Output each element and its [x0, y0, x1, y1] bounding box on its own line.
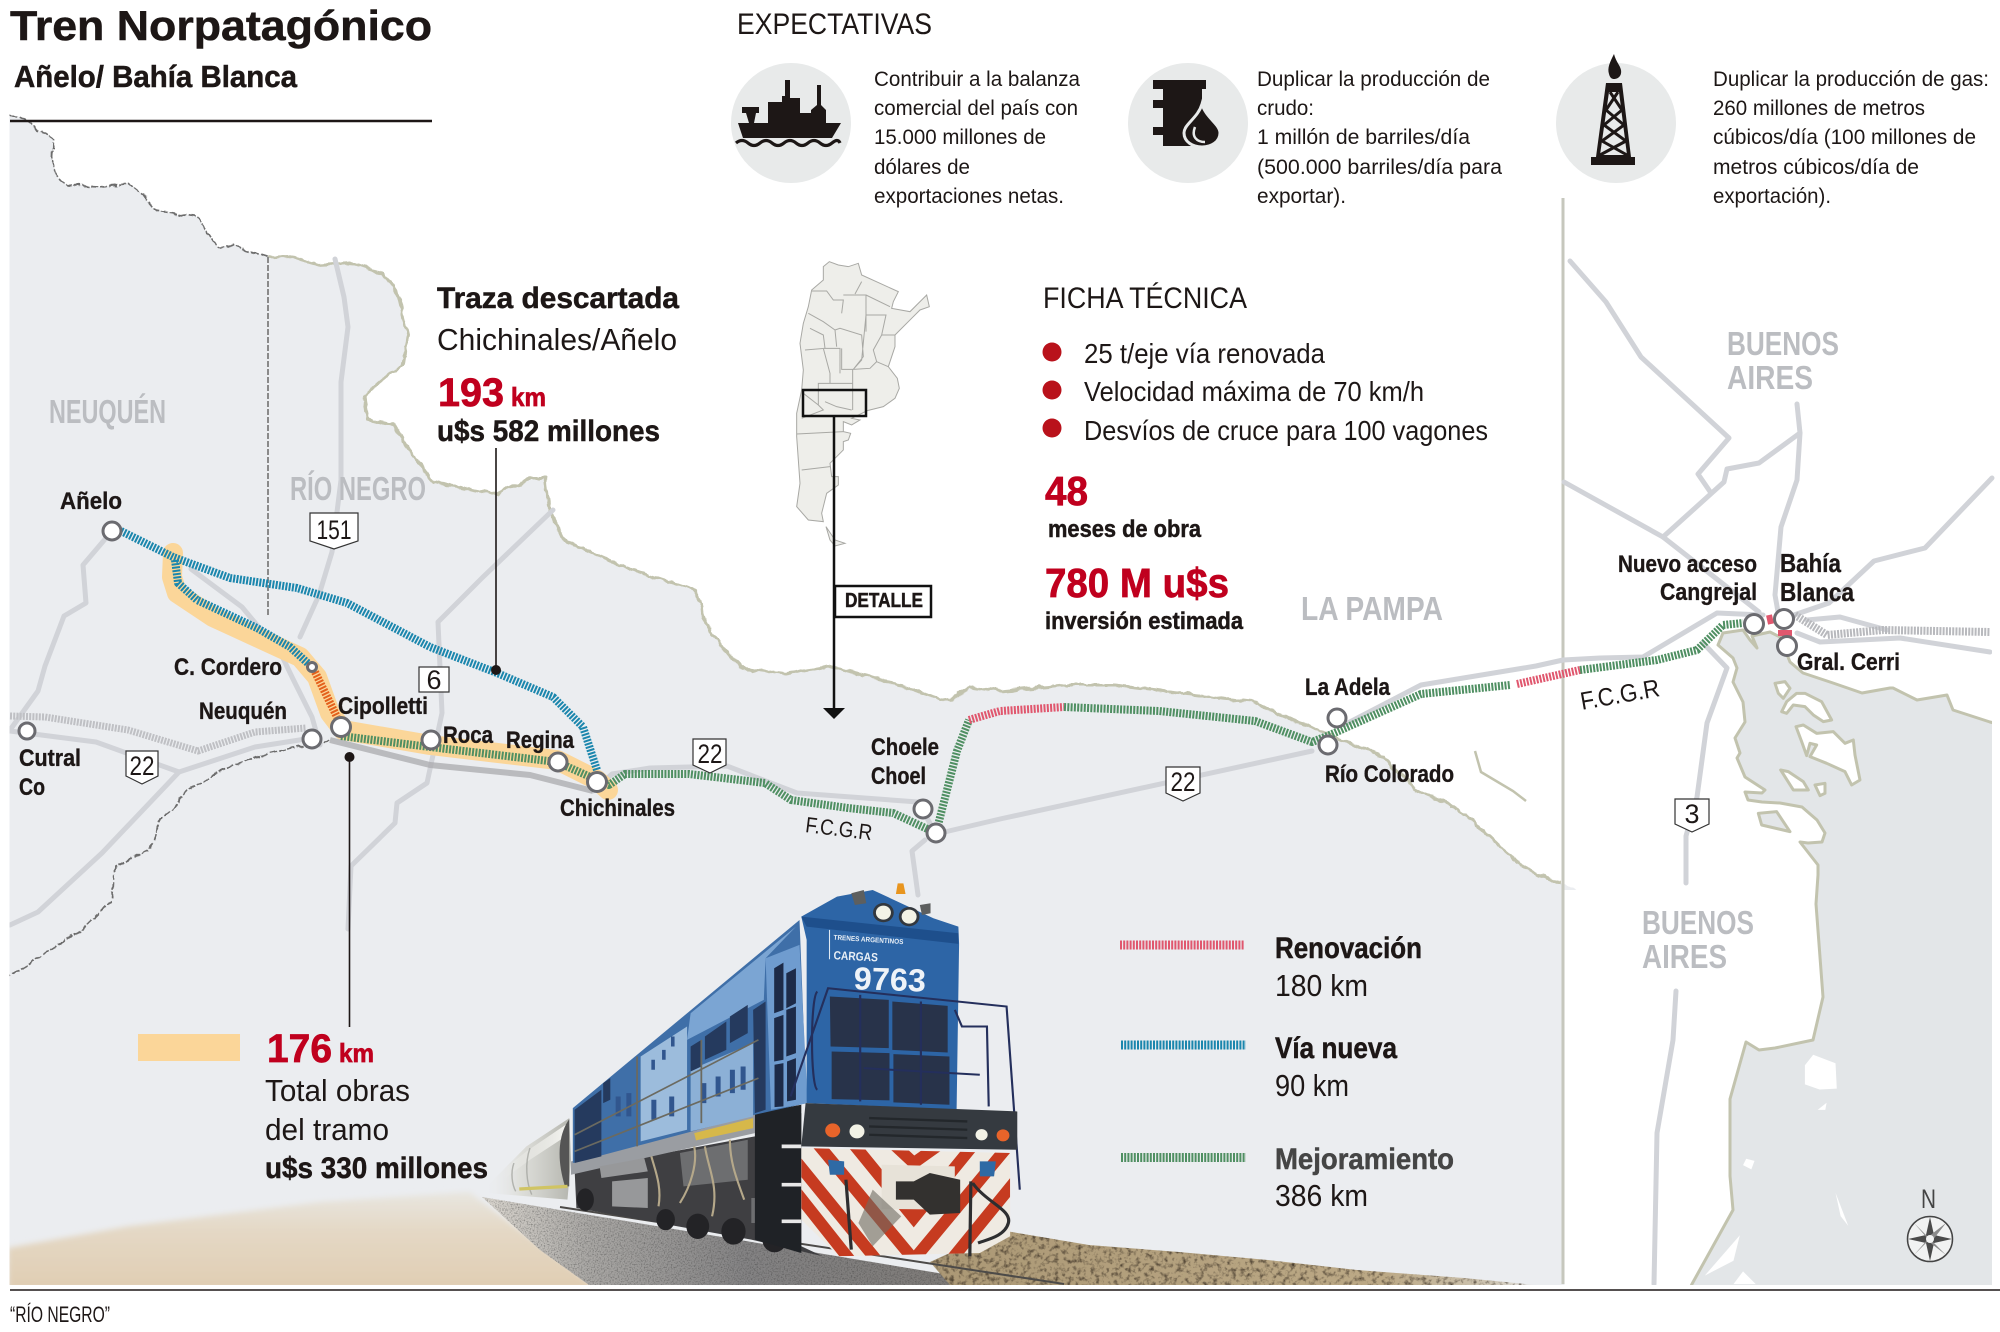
panel: works total: u$s 330 millones [265, 1152, 488, 1185]
track: improvement [341, 720, 969, 833]
province labels: RÍO NEGRO [290, 470, 426, 507]
legend: renovación: Renovación [1275, 932, 1422, 965]
text: gas [1713, 68, 1989, 208]
place labels: Chichinales [560, 795, 675, 822]
map: sea and bay in detail panel [1680, 630, 2000, 1310]
icon: oil barrel and drop [1128, 63, 1248, 183]
cab front [801, 890, 959, 1110]
icon: ship [731, 63, 851, 183]
text: crude: exportar). [1257, 185, 1346, 208]
panel: ficha técnica: meses de obra [1048, 516, 1202, 543]
cab lettering: CARGAS [833, 949, 878, 964]
panel: ficha técnica: Velocidad máxima de 70 km/h [1084, 376, 1424, 407]
track: renewal west [969, 707, 1064, 720]
panel: works total: del tramo [265, 1112, 389, 1147]
legend: vía nueva: Vía nueva [1275, 1032, 1397, 1065]
panel: works total: 176 [267, 1027, 332, 1071]
province labels: BUENOS [1642, 904, 1754, 941]
track: orange section [315, 672, 337, 717]
locator map of Argentina [797, 262, 931, 719]
title: Tren Norpatagónico [10, 2, 432, 49]
callout: discarded route [437, 282, 679, 675]
province labels: BUENOS [1727, 325, 1839, 362]
locator map of Argentina: DETALLE [845, 590, 923, 612]
place labels: Neuquén [199, 698, 287, 725]
route shields: 151 [316, 515, 352, 545]
place labels: Bahía [1780, 548, 1841, 578]
place labels: Nuevo acceso [1618, 551, 1757, 578]
place labels: Choel [871, 763, 926, 790]
subtitle: Añelo/ Bahía Blanca [14, 59, 298, 94]
detail label [835, 586, 931, 617]
tank wagons [484, 1118, 571, 1200]
islands in the bay [1758, 682, 1860, 832]
bottom rule [10, 1289, 2000, 1291]
panel: ficha técnica: 25 t/eje vía renovada [1084, 338, 1325, 369]
legend swatch: corridor [138, 1034, 240, 1061]
text: crude: 1 millón de barriles/día [1257, 126, 1470, 149]
place labels: La Adela [1305, 674, 1391, 701]
text: balance: exportaciones netas. [874, 185, 1064, 208]
panel divider [1562, 198, 1564, 1284]
province labels: NEUQUÉN [49, 393, 166, 430]
place labels: Río Colorado [1325, 761, 1454, 788]
headlights, beacon and horns [851, 883, 931, 926]
text: balance: comercial del país con [874, 97, 1078, 120]
panel: ficha técnica: 48 [1045, 468, 1088, 514]
map background: Neuquén, Río Negro and La Pampa land [0, 110, 1575, 1300]
rail tracks [121, 531, 1792, 833]
callout: discarded route: Chichinales/Añelo [437, 322, 677, 357]
text: gas: 260 millones de metros [1713, 97, 1925, 120]
compass: N [1921, 1184, 1936, 1214]
place labels: F.C.G.R [804, 812, 874, 845]
place labels: Choele [871, 734, 939, 761]
ground: sand, gravel and dry grass [8, 1192, 1536, 1290]
road network [10, 259, 1992, 1284]
place labels: Co [19, 774, 45, 801]
legend: mejoramiento: 386 km [1275, 1178, 1368, 1213]
track: renewal at terminal [1769, 615, 1792, 633]
front band with lamps [801, 1103, 1017, 1150]
place labels: Gral. Cerri [1797, 649, 1900, 676]
legend: renovación: 180 km [1275, 968, 1368, 1003]
side door panel [766, 945, 808, 1110]
compass [1908, 1184, 1952, 1262]
province labels: AIRES [1727, 359, 1813, 396]
pilot with red chevrons [801, 1148, 1010, 1256]
place labels: C. Cordero [174, 654, 282, 681]
legend: mejoramiento: Mejoramiento [1275, 1143, 1454, 1176]
place labels: Blanca [1780, 577, 1854, 607]
coastline and provincial boundary [10, 115, 1561, 976]
place labels: F.C.G.R [1578, 674, 1662, 716]
cab lettering: TRENES ARGENTINOS [833, 933, 904, 946]
panel: works total [138, 752, 488, 1185]
panel: expectativas [731, 8, 1989, 208]
handrails [791, 988, 1020, 1190]
frame and undercarriage [571, 1105, 823, 1256]
place labels: Cutral [19, 745, 81, 772]
panel: works total: km [339, 1038, 374, 1068]
route shields: 22 [1170, 767, 1196, 797]
cab lettering: 9763 [853, 961, 927, 999]
heading: EXPECTATIVAS [737, 8, 932, 41]
text: gas: cúbicos/día (100 millones de [1713, 126, 1976, 149]
place labels: Cipolletti [338, 693, 428, 720]
highlighted works corridor [172, 553, 608, 790]
text: crude: Duplicar la producción de [1257, 68, 1490, 91]
route shields [126, 513, 1709, 832]
route shields: 3 [1684, 799, 1700, 829]
track: improvement to Bahía Blanca [1580, 623, 1743, 670]
radiator grilles [830, 997, 949, 1105]
panel: ficha técnica: Desvíos de cruce para 100 vagones [1084, 415, 1488, 446]
title rule [10, 120, 432, 122]
panel: ficha técnica: inversión estimada [1045, 608, 1244, 635]
text: gas: Duplicar la producción de gas: [1713, 68, 1989, 91]
text: gas: exportación). [1713, 185, 1831, 208]
text: crude: (500.000 barriles/día para [1257, 156, 1502, 179]
side railing [575, 1040, 758, 1151]
text: crude: crudo: [1257, 97, 1314, 120]
track: renewal east [1517, 670, 1580, 684]
callout: discarded route: km [511, 382, 546, 412]
place labels: Roca [443, 722, 494, 749]
callout: discarded route: Traza descartada [437, 282, 679, 315]
detail arrow [833, 416, 835, 708]
stations [19, 522, 1796, 842]
panel: ficha técnica: FICHA TÉCNICA [1043, 282, 1247, 315]
text: crude [1257, 68, 1502, 208]
panel: ficha técnica: 780 M u$s [1045, 560, 1229, 606]
cab lettering [830, 930, 927, 999]
province labels [49, 325, 1839, 975]
coupler [828, 1160, 1009, 1256]
long hood [573, 920, 807, 1163]
place labels: Añelo [60, 488, 122, 515]
text: balance: dólares de [874, 156, 970, 179]
road along corridor [330, 740, 593, 791]
place labels: Cangrejal [1660, 579, 1757, 606]
callout: discarded route: 193 [438, 371, 504, 415]
source credit: “RÍO NEGRO” [10, 1302, 110, 1327]
text: balance: 15.000 millones de [874, 126, 1046, 149]
province labels: AIRES [1642, 938, 1727, 975]
track: new line, discarded route [121, 531, 597, 770]
locator box [803, 390, 866, 416]
legend: vía nueva: 90 km [1275, 1068, 1349, 1103]
route shields: 22 [130, 751, 154, 781]
text: balance: Contribuir a la balanza [874, 68, 1080, 91]
text: gas: metros cúbicos/día de [1713, 156, 1919, 179]
legend [1120, 932, 1454, 1213]
text: balance [874, 68, 1080, 208]
train photo illustration [506, 883, 1021, 1256]
place labels: Regina [506, 727, 575, 754]
province labels: LA PAMPA [1301, 590, 1443, 627]
legend: mejoramiento [1121, 1143, 1454, 1213]
route shields: 6 [426, 665, 442, 695]
track: new line, first section [175, 560, 312, 667]
callout: discarded route: u$s 582 millones [437, 415, 660, 448]
panel: ficha técnica [1042, 282, 1488, 635]
icon: gas derrick [1556, 54, 1676, 183]
track: improvement east [1064, 685, 1510, 742]
title [10, 2, 432, 121]
legend: renovación [1120, 932, 1422, 1003]
route shields: 22 [698, 739, 722, 769]
place labels [19, 488, 1900, 845]
legend: vía nueva [1121, 1032, 1397, 1103]
panel: works total: Total obras [265, 1073, 410, 1108]
